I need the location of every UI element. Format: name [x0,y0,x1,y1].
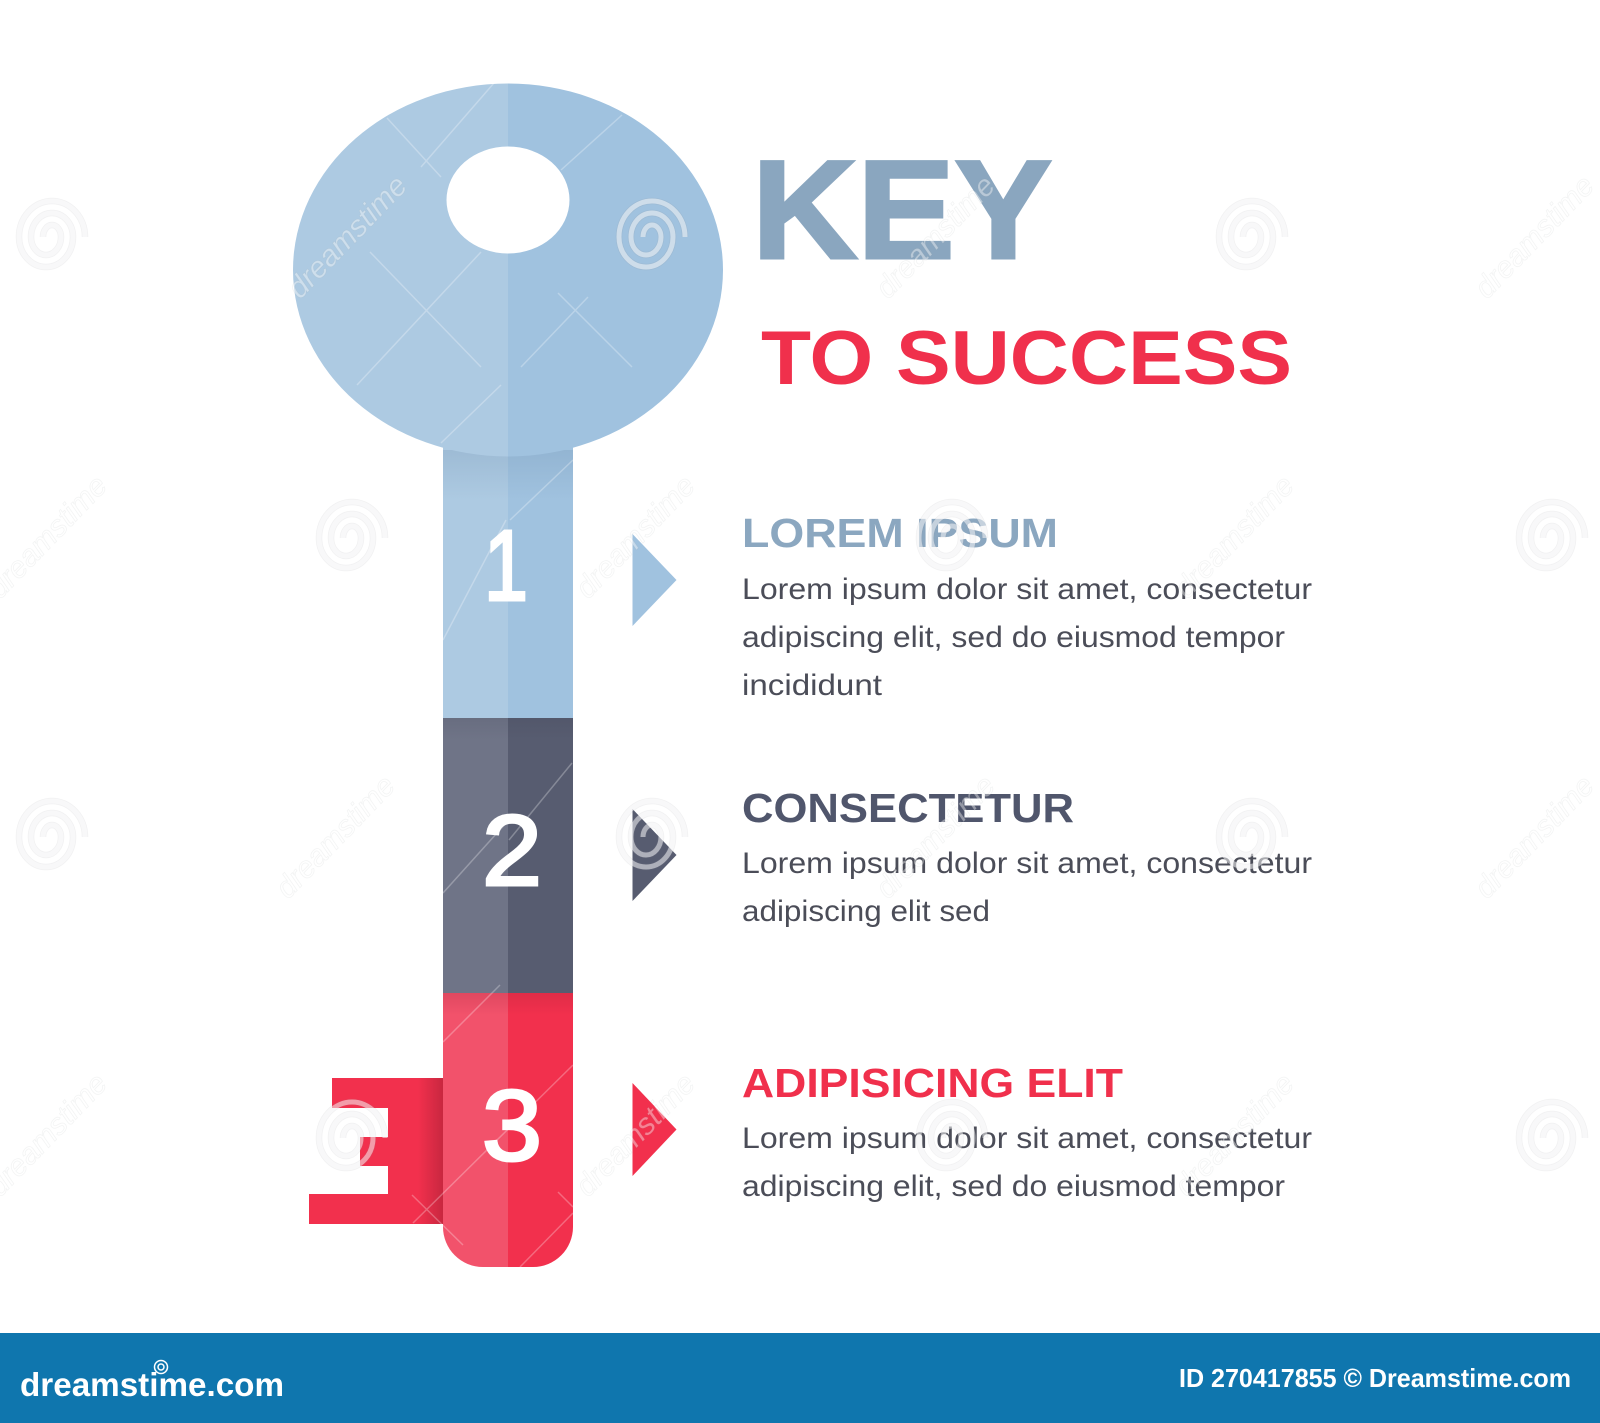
text block 2 [742,785,1312,928]
stock-photo watermark overlay: dreamstime [1468,169,1600,305]
body text 1: adipiscing elit, sed do eiusmod tempor [742,621,1285,654]
body text 2 [742,847,1312,928]
stock-photo watermark overlay: dreamstime [1468,769,1600,905]
number 1: 1 [484,510,528,622]
body text 1: incididunt [742,669,883,702]
body text 3: adipiscing elit, sed do eiusmod tempor [742,1170,1285,1203]
arrow 2 [632,809,676,901]
footer logo spiral [154,1360,168,1374]
body text 2: adipiscing elit sed [742,895,990,928]
title: KEY: KEY [752,131,1052,288]
key bit (teeth) [309,1078,445,1224]
heading: Lorem Ipsum: LOREM IPSUM [742,510,1058,556]
footer band [0,1333,1600,1423]
stock-photo watermark overlay: dreamstime [1168,1067,1301,1203]
body text 2: Lorem ipsum dolor sit amet, consectetur [742,847,1312,880]
heading: Consectetur: CONSECTETUR [742,785,1074,831]
key shaft segment 1 [443,440,573,718]
text block 3 [742,1060,1312,1203]
stock-photo watermark overlay: dreamstime [281,169,414,305]
stock-photo watermark overlay: dreamstime [869,169,1002,305]
footer credit: ID 270417855 © Dreamstime.com [1179,1363,1571,1393]
body text 3: Lorem ipsum dolor sit amet, consectetur [742,1122,1312,1155]
text block 1 [742,510,1312,702]
key shaft segment 3 [443,993,573,1267]
stock-photo watermark overlay: dreamstime [1168,469,1301,605]
key head [293,84,723,456]
stock-photo watermark overlay: dreamstime [269,769,402,905]
number 3: 3 [482,1070,542,1182]
key illustration [293,84,723,1267]
number 2: 2 [482,795,542,907]
stock-photo watermark overlay: dreamstime [869,769,1002,905]
arrow 3 [632,1083,676,1176]
stock-photo watermark overlay: dreamstime [569,469,702,605]
title: TO SUCCESS: TO SUCCESS [761,316,1292,401]
heading: Adipisicing Elit: ADIPISICING ELIT [742,1060,1123,1106]
key shaft segment 2 [443,718,573,993]
body text 1: Lorem ipsum dolor sit amet, consectetur [742,573,1312,606]
footer logo: dreamstime.com [20,1366,284,1403]
arrow 1 [632,534,676,626]
stock-photo watermark overlay: dreamstime [569,1067,702,1203]
body text 1 [742,573,1312,702]
body text 3 [742,1122,1312,1203]
